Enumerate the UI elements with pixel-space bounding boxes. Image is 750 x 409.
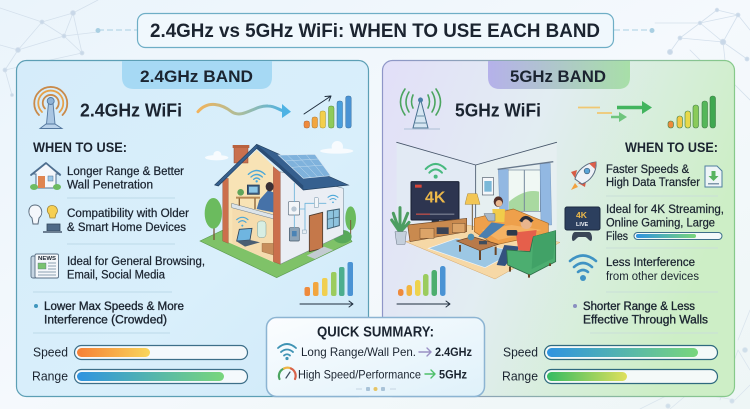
icon: lower signal bars — [397, 266, 450, 307]
text: shorter range — [573, 299, 708, 326]
text: faster speeds: Faster Speeds & — [606, 162, 689, 176]
text: browsing — [67, 254, 205, 282]
text: longer range: Wall Penetration — [67, 178, 153, 192]
network decoration: top right — [655, 8, 750, 100]
title banner: 2.4GHz vs 5GHz WiFi: WHEN TO USE EACH BAND — [150, 20, 600, 42]
title banner — [96, 14, 654, 48]
icon: 2.4GHz antenna — [34, 87, 67, 128]
wifi icon — [426, 164, 446, 173]
icon: rocket — [571, 162, 596, 190]
brick walls — [223, 178, 228, 243]
text: high speed row: 5GHz — [439, 368, 467, 382]
door — [309, 212, 323, 252]
plant — [392, 208, 409, 232]
man — [497, 245, 520, 266]
bar: range 2.4GHz: Range — [32, 368, 68, 384]
trees — [205, 198, 356, 243]
woman — [478, 222, 505, 238]
illustration: living room: 4K — [425, 190, 446, 207]
icon: wavy arrow — [198, 104, 291, 118]
network decoration: bottom right — [640, 310, 750, 409]
text: less interference — [606, 255, 699, 283]
person — [257, 190, 273, 212]
band tab: 5GHz — [488, 61, 630, 89]
text: 4K streaming — [606, 202, 724, 243]
icon: wifi blue — [570, 256, 596, 281]
icon: house — [30, 163, 61, 190]
heading: quick summary: QUICK SUMMARY: — [317, 324, 434, 340]
text: longer range — [67, 164, 184, 192]
band tab: 2.4GHz — [122, 61, 272, 89]
panel: 2.4GHz band — [16, 60, 368, 396]
text: browsing: Email, Social Media — [67, 268, 165, 282]
window — [327, 209, 339, 229]
sofa — [474, 209, 548, 245]
text: high speed row: High Speed/Performance — [298, 368, 421, 382]
window — [508, 170, 540, 212]
wifi upstairs — [248, 170, 265, 179]
wifi downstairs — [237, 217, 248, 222]
bar: range 5GHz — [502, 368, 718, 384]
text: long range row — [301, 345, 472, 359]
rug — [428, 238, 515, 268]
bar: range 2.4GHz — [32, 368, 248, 384]
icon: newspaper: NEWS — [38, 256, 57, 262]
text: less interference: from other devices — [606, 269, 699, 283]
wall devices — [288, 202, 300, 215]
chimney — [234, 146, 248, 163]
router and box — [257, 221, 266, 238]
tv — [411, 182, 459, 220]
text: longer range: Longer Range & Better — [67, 164, 184, 178]
text: shorter range: Effective Through Walls — [583, 312, 708, 326]
icon: 4K live tv and controller: LIVE — [576, 222, 589, 228]
text: 4K streaming: Online Gaming, Large — [606, 216, 715, 230]
text: browsing: Ideal for General Browsing, — [67, 254, 205, 268]
heading: when to use: WHEN TO USE: — [33, 140, 127, 155]
armchair — [507, 231, 556, 275]
heading: 5GHz WiFi: 5GHz WiFi — [455, 100, 541, 120]
picture — [482, 178, 494, 195]
bar: speed 5GHz — [503, 344, 718, 360]
text: lower max speeds: Lower Max Speeds & More — [44, 299, 184, 313]
bar: speed 2.4GHz — [33, 344, 248, 360]
walls — [397, 142, 476, 235]
text: less interference: Less Interference — [606, 255, 695, 269]
icon: rising signal bars — [304, 96, 351, 128]
solar panel — [278, 154, 331, 178]
icon: bulbs and laptop — [29, 205, 62, 233]
text: compatibility — [67, 206, 189, 234]
side wall — [280, 172, 343, 264]
band tab: 5GHz: 5GHz BAND — [510, 67, 606, 86]
text: shorter range: Shorter Range & Less — [583, 299, 695, 313]
text: lower max speeds — [34, 299, 184, 326]
icon: 4K live tv and controller — [565, 207, 600, 241]
text: compatibility: & Smart Home Devices — [67, 220, 186, 234]
ground — [200, 228, 352, 278]
lamp — [471, 203, 474, 230]
icon: download document — [705, 166, 722, 187]
icon: 4K live tv and controller: 4K — [576, 210, 588, 220]
text: 4K streaming: Ideal for 4K Streaming, — [606, 202, 724, 216]
tv stand — [408, 218, 467, 242]
laptop — [237, 228, 252, 241]
icon: lower signal bars — [300, 262, 353, 307]
text: lower max speeds: Interference (Crowded) — [44, 312, 167, 326]
text: long range row: Long Range/Wall Pen. — [301, 345, 416, 359]
illustration: living room — [392, 142, 560, 279]
network decoration: top left — [0, 0, 98, 96]
clouds — [205, 141, 353, 160]
text: 4K streaming: Files — [606, 229, 628, 243]
path — [307, 247, 333, 259]
floor — [406, 225, 560, 279]
icon: fast arrows — [578, 101, 652, 122]
icon: green signal bars — [668, 96, 716, 128]
desk and monitor — [247, 185, 259, 194]
illustration: house — [200, 141, 356, 278]
heading: 2.4GHz WiFi: 2.4GHz WiFi — [80, 100, 182, 120]
heading: when to use: WHEN TO USE: — [625, 140, 718, 155]
bar: speed 5GHz: Speed — [503, 344, 538, 360]
bar: mini performance — [634, 232, 722, 240]
band tab: 2.4GHz: 2.4GHz BAND — [140, 67, 253, 86]
icon: gauge — [279, 368, 296, 379]
text: faster speeds: High Data Transfer — [606, 175, 700, 189]
text: compatibility: Compatibility with Older — [67, 206, 189, 220]
roof — [215, 144, 348, 190]
icon: wifi — [278, 344, 296, 360]
icon: newspaper — [31, 254, 58, 278]
bar: range 5GHz: Range — [502, 368, 538, 384]
text: long range row: 2.4GHz — [435, 345, 472, 359]
text: faster speeds — [606, 162, 700, 189]
coffee table — [460, 245, 496, 260]
bar: speed 2.4GHz: Speed — [33, 344, 68, 360]
panel: quick summary — [266, 318, 484, 396]
pagination dots — [356, 387, 396, 391]
interior — [228, 150, 274, 262]
icon: 5GHz antenna — [400, 89, 440, 129]
panel: 5GHz band — [382, 60, 734, 396]
